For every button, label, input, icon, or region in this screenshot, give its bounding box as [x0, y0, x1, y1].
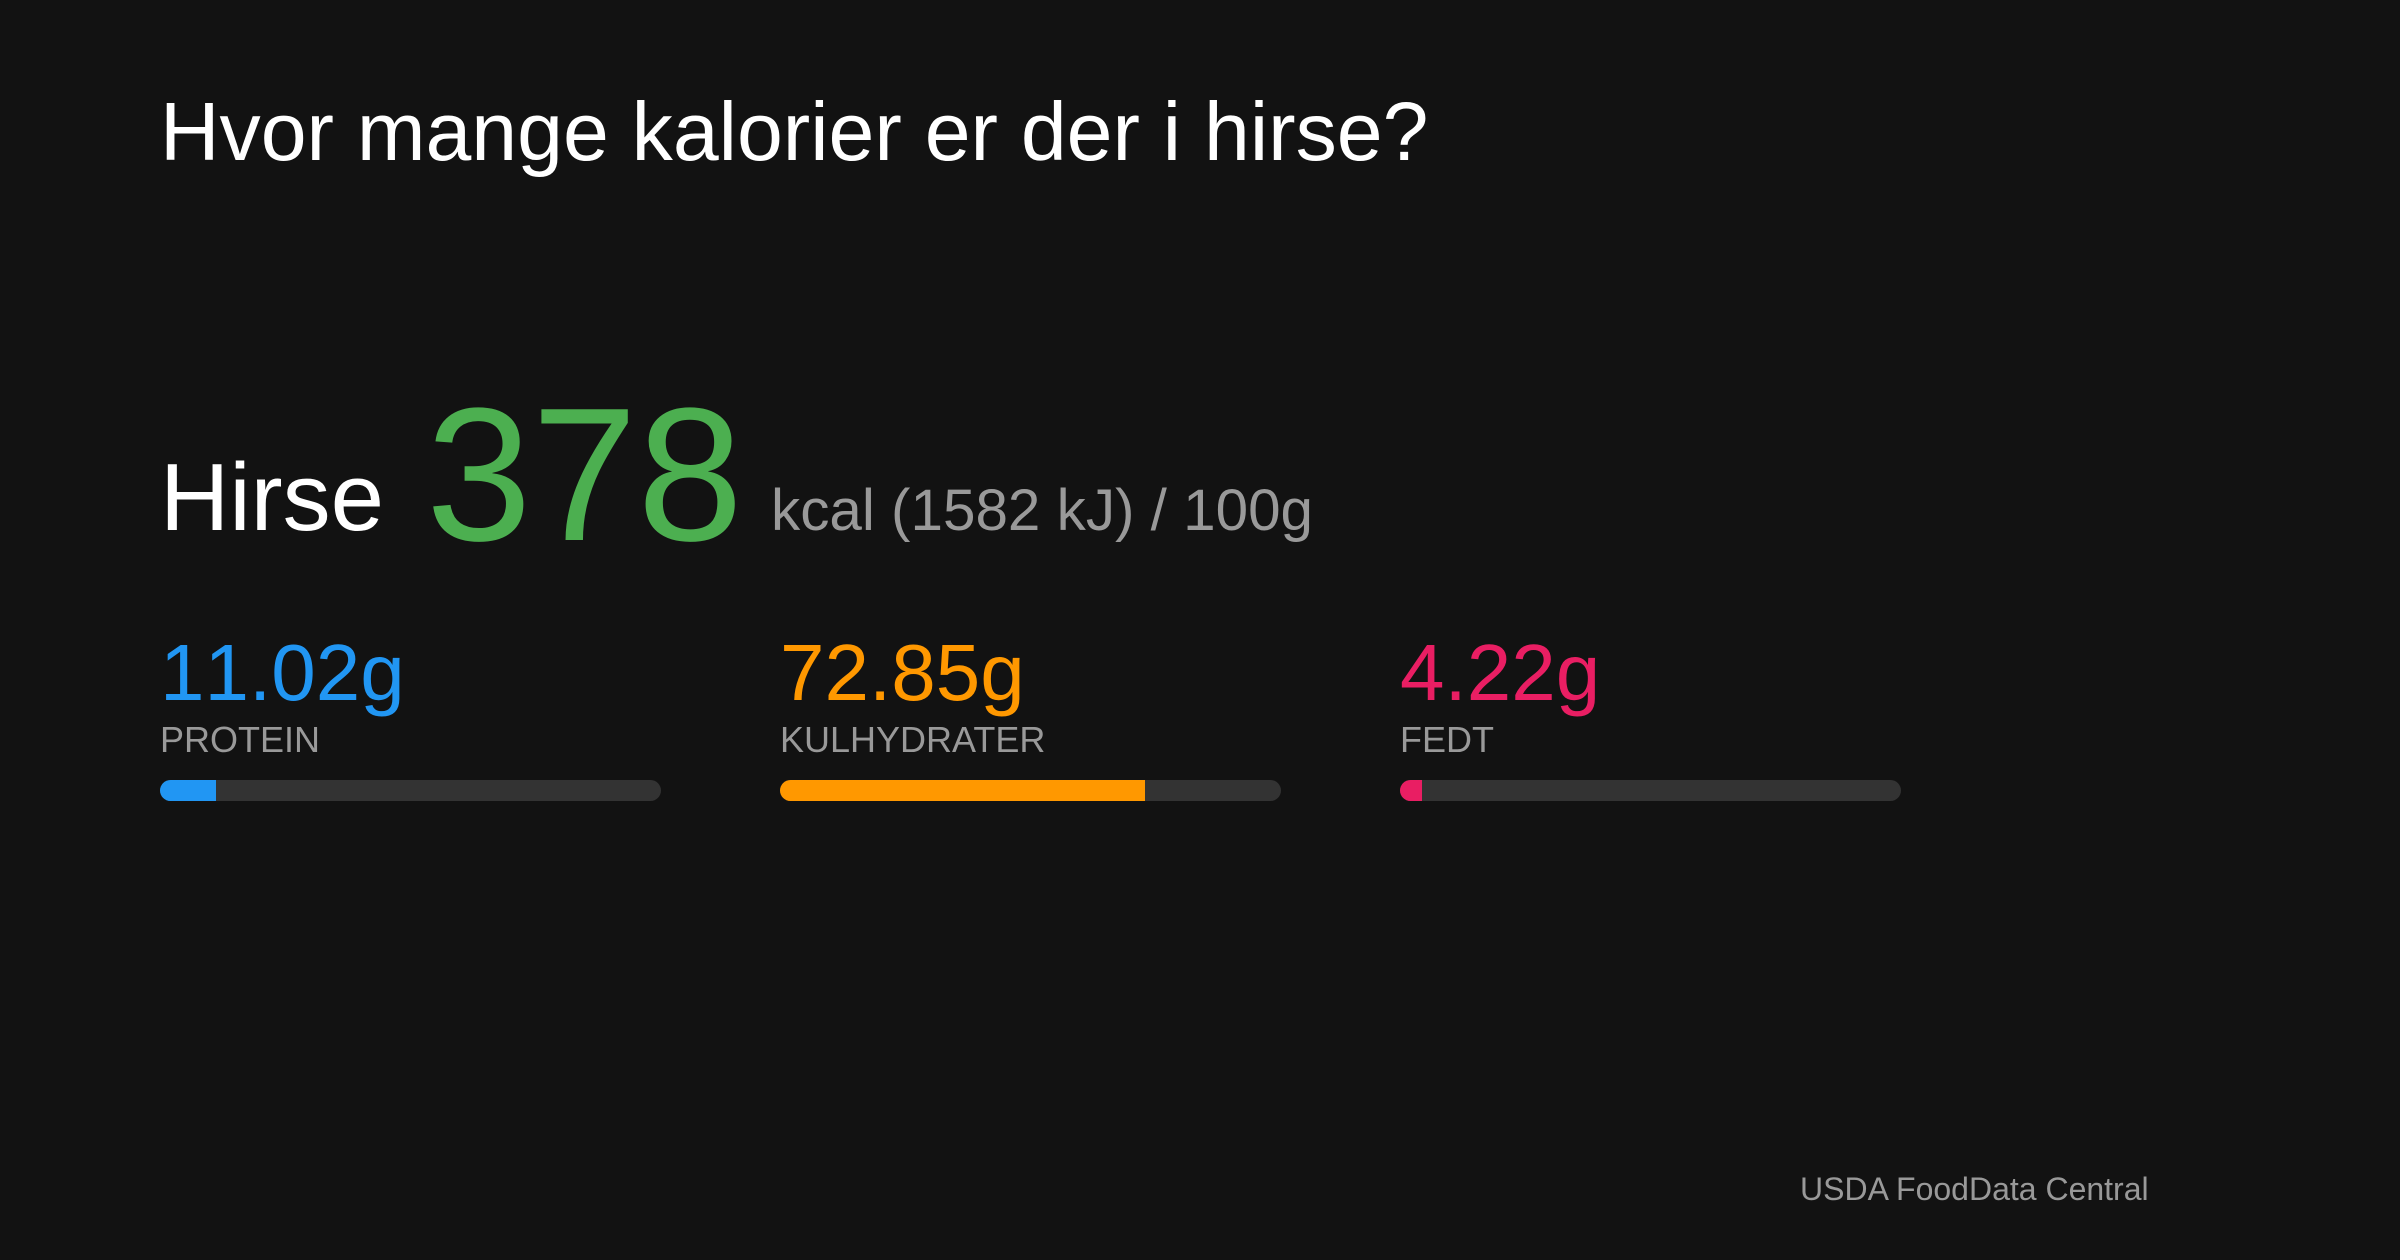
protein progress bar: [160, 780, 661, 801]
carbohydrate value: 72.85g: [780, 628, 1025, 717]
fat progress bar: [1400, 780, 1901, 801]
panel: protein: [160, 628, 661, 801]
food name: Hirse: Hirse: [160, 444, 384, 551]
source credit: USDA FoodData Central: [1800, 1171, 2149, 1207]
calorie unit text: kcal (1582 kJ) / 100g: [771, 478, 1313, 543]
carbohydrate progress bar: [780, 780, 1281, 801]
protein label: PROTEIN: [160, 719, 320, 760]
calorie value: 378: [426, 369, 743, 581]
protein value: 11.02g: [160, 628, 405, 717]
fat value: 4.22g: [1400, 628, 1600, 717]
carbohydrate label: KULHYDRATER: [780, 719, 1045, 760]
fat label: FEDT: [1400, 719, 1494, 760]
title: Hvor mange kalorier er der i hirse?: [160, 86, 1428, 178]
panel: kulhydrater: [780, 628, 1281, 801]
panel: fedt: [1400, 628, 1901, 801]
